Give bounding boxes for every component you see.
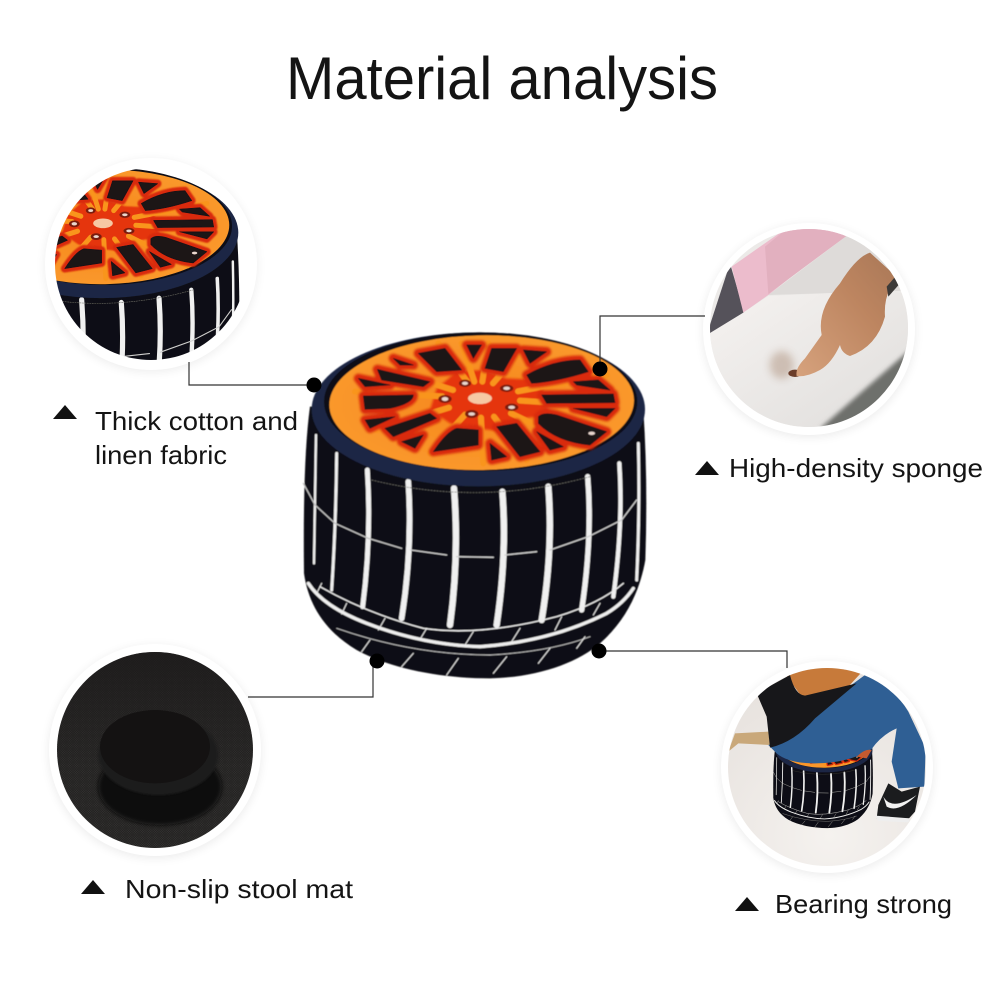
label: thick cotton and linen fabric: Thick cotton and [95, 406, 298, 436]
title: Material analysis [286, 45, 718, 112]
tread bands [308, 583, 633, 675]
main product: tire stool [303, 332, 646, 678]
hand pressing foam [796, 253, 898, 376]
orange wheel face [328, 333, 635, 473]
inset: non-slip stool mat [48, 652, 262, 859]
label: thick cotton and linen fabric: linen fabric [95, 440, 227, 470]
label: high-density sponge: High-density sponge [729, 453, 983, 483]
navy rim [312, 332, 645, 486]
inset: fabric close-up [45, 169, 257, 372]
leader line: bearing [592, 644, 787, 668]
inset: high-density sponge [702, 229, 916, 438]
inset: bearing strong [720, 660, 940, 880]
tire body [304, 407, 646, 678]
wheel spokes [355, 343, 613, 463]
leader line: sponge [592, 316, 705, 376]
red hub star [430, 370, 553, 432]
wheel windows [358, 345, 615, 460]
label: non-slip stool mat: Non-slip stool mat [125, 874, 354, 904]
bolts and hub logo [438, 380, 595, 435]
sidewall white grooves [303, 435, 639, 625]
label: thick cotton and linen fabric [53, 405, 298, 470]
leader line: stool mat [248, 654, 384, 697]
leader line: fabric [189, 362, 322, 392]
label: bearing strong: Bearing strong [775, 889, 952, 919]
